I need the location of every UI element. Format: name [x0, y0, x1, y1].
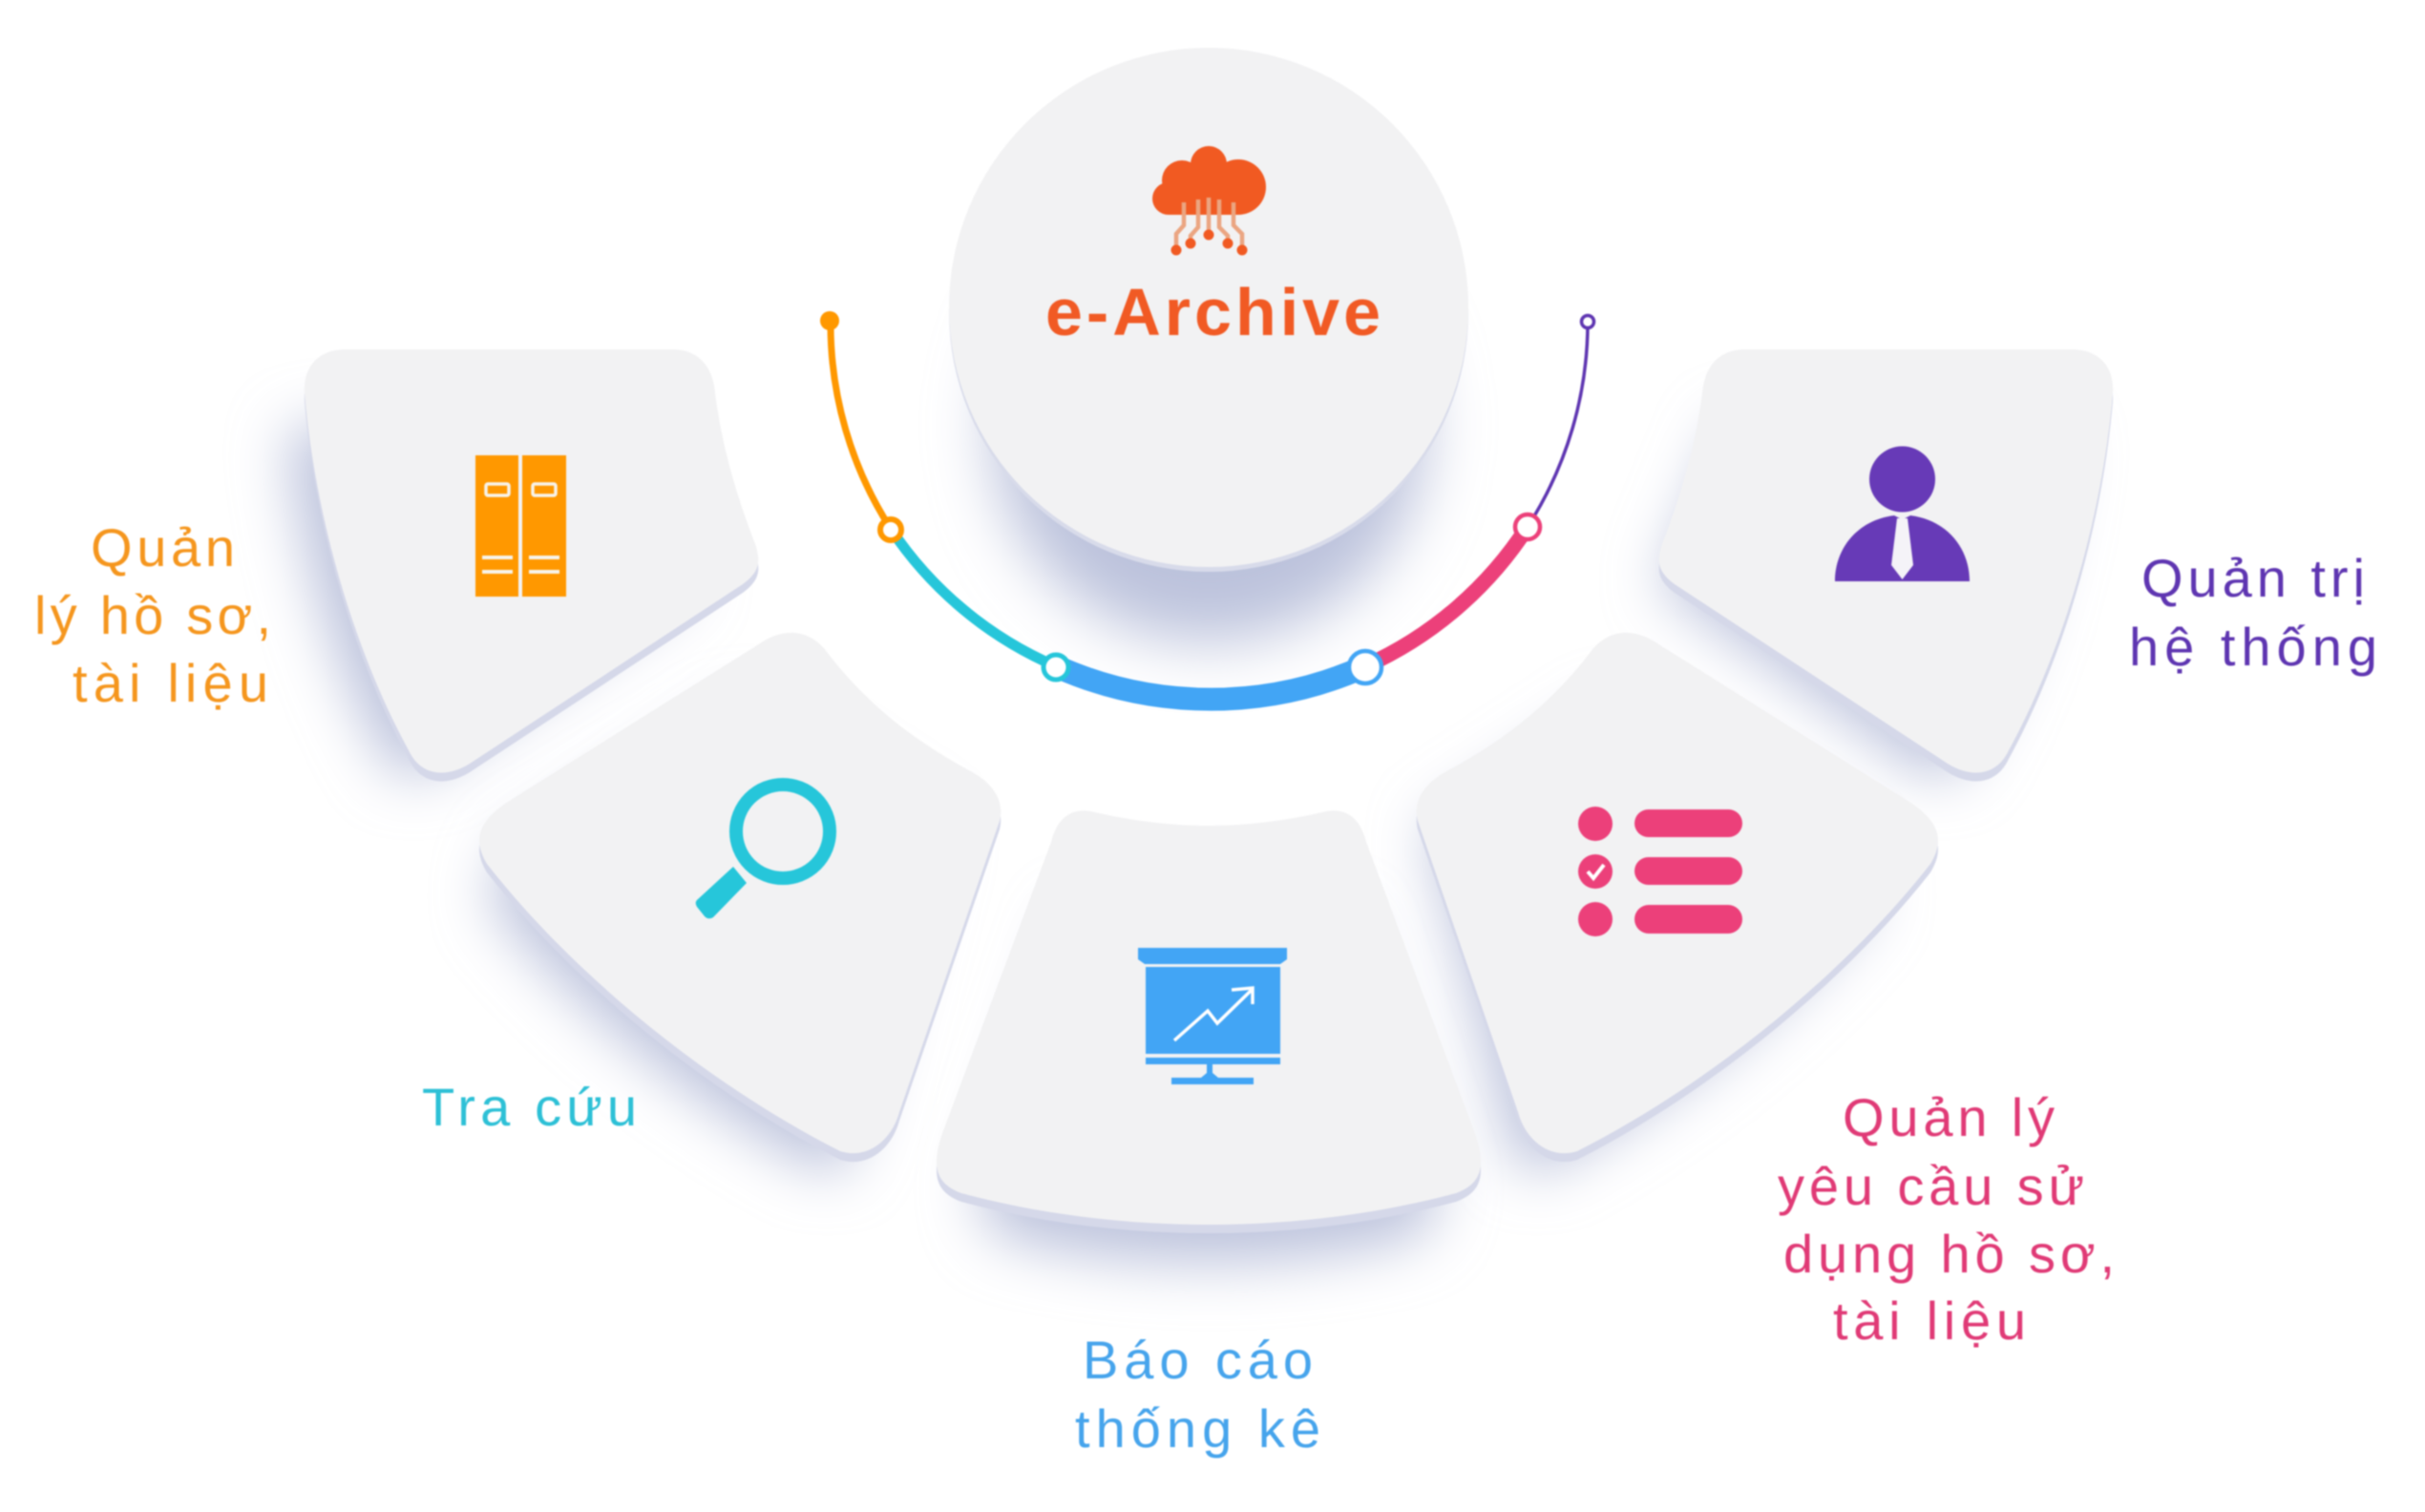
panel: card báo cáo thống kê: [937, 810, 1481, 1263]
label: quản lý yêu cầu sử dụng hồ sơ, tài liệu: [1778, 1087, 2115, 1351]
label: quản lý yêu cầu sử dụng hồ sơ, tài liệu: tài liệu: [1833, 1291, 2026, 1351]
icon: magnifying glass: [696, 785, 830, 918]
label: quản lý hồ sơ, tài liệu: lý hồ sơ,: [34, 585, 271, 645]
label: quản lý yêu cầu sử dụng hồ sơ, tài liệu: Quản lý: [1843, 1087, 2055, 1147]
icon: document binders: [475, 455, 566, 597]
label: quản lý yêu cầu sử dụng hồ sơ, tài liệu: dụng hồ sơ,: [1783, 1224, 2115, 1284]
label: quản trị hệ thống: hệ thống: [2129, 617, 2377, 677]
label: báo cáo thống kê: [1075, 1330, 1320, 1459]
label: quản trị hệ thống: [2129, 548, 2377, 677]
label: báo cáo thống kê: thống kê: [1075, 1398, 1320, 1459]
label: quản lý hồ sơ, tài liệu: Quản: [91, 517, 235, 578]
icon: presentation screen with chart: [1138, 948, 1287, 1084]
icon: person with tie: [1835, 447, 1970, 581]
label: quản lý hồ sơ, tài liệu: tài liệu: [73, 653, 268, 713]
arc: segmented timeline: [820, 311, 1594, 700]
panel: card quản lý yêu cầu: [1417, 633, 1938, 1172]
label: quản lý yêu cầu sử dụng hồ sơ, tài liệu: yêu cầu sử: [1778, 1156, 2084, 1216]
icon: cloud with circuit: [1152, 146, 1266, 256]
panel: card quản trị hệ thống: [1659, 349, 2113, 781]
title: e-Archive: [1045, 275, 1381, 349]
label: quản lý hồ sơ, tài liệu: [34, 517, 271, 713]
icon: checklist: [1578, 807, 1742, 936]
label: quản trị hệ thống: Quản trị: [2141, 548, 2365, 608]
label: tra cứu: Tra cứu: [422, 1077, 637, 1137]
label: báo cáo thống kê: Báo cáo: [1083, 1330, 1313, 1390]
panel: central circle: [949, 48, 1468, 642]
panel: card tra cứu: [479, 633, 1001, 1172]
panel: card quản lý hồ sơ, tài liệu: [287, 349, 758, 781]
